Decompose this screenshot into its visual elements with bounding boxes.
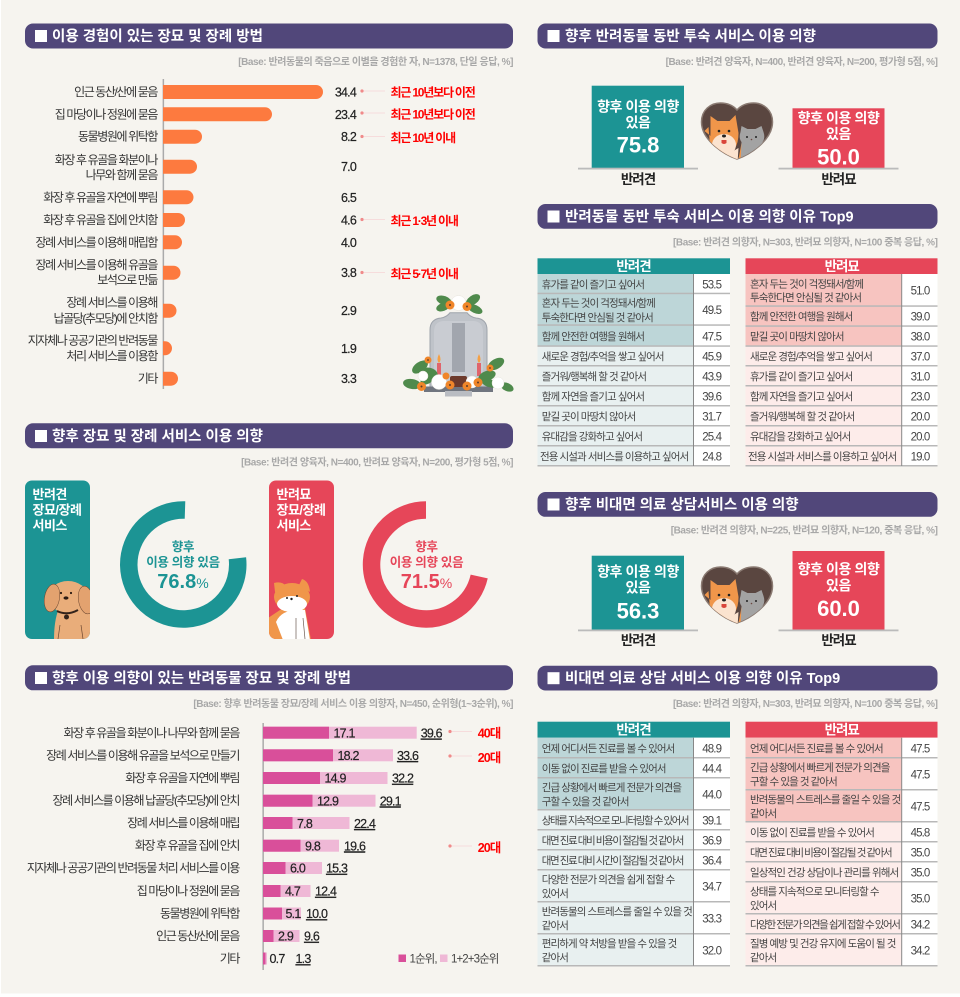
row: 장례 서비스를 이용해 매립: 22.4 — [354, 817, 376, 831]
row: 인근 동산/산에 묻음: 2.9 — [278, 930, 294, 944]
row: 장례 서비스를 이용해 유골을 보석으로 만들기: 장례 서비스를 이용해 유골을 보석으로 만들기 — [46, 748, 239, 762]
bar: 반려견 75.8: 75.8 — [617, 133, 659, 158]
heading: 향후 비대면 의료 상담서비스 이용 의향: 향후 비대면 의료 상담서비스 이용 의향 — [565, 496, 799, 514]
row: 집 마당이나 정원에 묻음 — [137, 884, 337, 899]
panel: 반려묘 장묘/장례 서비스 — [268, 480, 334, 640]
row: 동물병원에 위탁함: 10.0 — [306, 907, 328, 921]
row: 화장 후 유골을 화분이나 나무와 함께 묻음 — [64, 726, 443, 740]
row: 화장 후 유골을 자연에 뿌림: 14.9 — [324, 772, 346, 786]
row: 장례 서비스를 이용해 매립 — [127, 816, 376, 831]
donut chart: 반려견 76.8%: 향후 — [172, 539, 194, 554]
table: 반려묘 투숙 이유: 23.0 — [911, 392, 930, 404]
row: 화장 후 유골을 집에 안치함: 4.6 — [341, 214, 357, 228]
table: 반려묘 비대면 이유: 35.0 — [911, 848, 930, 860]
table: 반려묘 비대면 이유: 있어서 — [750, 900, 777, 912]
callout: 최근 10년 이내: 최근 10년 이내 — [390, 131, 455, 145]
row: 집 마당이나 정원에 묻음: 12.4 — [315, 885, 337, 899]
row: 지자체나 공공기관의 반려동물 처리 서비스를 이용: 6.0 — [290, 862, 306, 876]
heading: 이용 경험이 있는 장묘 및 장례 방법 — [25, 24, 513, 48]
row: 화장 후 유골을 화분이나 나무와 함께 묻음: 17.1 — [334, 726, 355, 740]
row: 장례 서비스를 이용해 납골당(추모당)에 안치: 12.9 — [317, 794, 339, 808]
row: 장례 서비스를 이용해 납골당(추모당)에 안치 — [53, 794, 402, 808]
table: 반려묘 비대면 이유: 같아서 — [750, 952, 777, 964]
table: 반려견 투숙 이유: 43.9 — [702, 372, 722, 384]
row: 화장 후 유골을 자연에 뿌림 — [43, 190, 357, 205]
heading: 향후 이용 의향이 있는 반려동물 장묘 및 장례 방법: 향후 이용 의향이 있는 반려동물 장묘 및 장례 방법 — [52, 670, 351, 687]
callout: 최근 1·3년 이내 — [360, 214, 458, 228]
bar: 반려묘 60.0: 있음 — [826, 578, 851, 594]
row: 화장 후 유골을 집에 안치함: 화장 후 유골을 집에 안치함 — [43, 213, 158, 227]
table: 반려묘 비대면 이유: 대면 진료 대비 비용이 절감될 것 같아서 — [750, 846, 892, 859]
table: 반려묘 비대면 이유: 47.5 — [911, 802, 930, 814]
row: 집 마당이나 정원에 묻음 — [55, 107, 357, 122]
callout: 최근 10년보다 이전 (1) — [360, 84, 476, 100]
table: 반려묘 비대면 이유 — [746, 722, 938, 966]
row: 기타 — [138, 372, 357, 386]
legend: 1+2+3순위 — [451, 952, 499, 966]
row: 화장 후 유골을 자연에 뿌림 — [125, 771, 414, 786]
table: 반려묘 투숙 이유: 31.0 — [911, 372, 930, 384]
table: 반려묘 투숙 이유 — [746, 258, 938, 466]
table: 반려견 비대면 이유: 이동 없이 진료를 받을 수 있어서 — [542, 762, 666, 775]
table: 반려묘 비대면 이유: 반려동물의 스트레스를 줄일 수 있을 것 — [750, 793, 900, 806]
table: 반려묘 투숙 이유: 51.0 — [911, 286, 930, 298]
row: 기타: 3.3 — [341, 372, 357, 386]
heading: 향후 장묘 및 장례 서비스 이용 의향: 향후 장묘 및 장례 서비스 이용 의향 — [52, 428, 263, 445]
row: 장례 서비스를 이용해 납골당(추모당)에 안치: 장례 서비스를 이용해 납골당(추모당)에 안치 — [53, 794, 239, 808]
table: 반려묘 비대면 이유: 일상적인 건강 상담이나 관리를 위해서 — [750, 866, 898, 879]
table: 반려견 투숙 이유: 새로운 경험/추억을 쌓고 싶어서 — [542, 350, 664, 363]
row: 지자체나 공공기관의 반려동물 처리 서비스를 이용함: 1.9 — [341, 342, 357, 356]
base note: [Base: 반려견 의향자, N=303, 반려묘 의향자, N=100 중복 응답, %] — [673, 236, 938, 248]
table: 반려묘 비대면 이유: 47.5 — [911, 744, 930, 756]
table: 반려묘 투숙 이유: 휴가를 같이 즐기고 싶어서 — [750, 371, 853, 383]
row: 인근 동산/산에 묻음: 인근 동산/산에 묻음 — [74, 85, 158, 99]
table: 반려견 비대면 이유: 같아서 — [542, 920, 568, 932]
row: 기타: 기타 — [138, 372, 158, 386]
row: 동물병원에 위탁함: 5.1 — [286, 907, 301, 921]
bar: 반려견 56.3: 있음 — [626, 580, 651, 596]
table: 반려견 비대면 이유: 39.1 — [702, 816, 722, 828]
panel: 반려견 장묘/장례 서비스 — [25, 480, 96, 640]
row: 장례 서비스를 이용해 매립: 7.8 — [297, 817, 313, 831]
row: 집 마당이나 정원에 묻음: 23.4 — [335, 108, 357, 122]
heading: 이용 경험이 있는 장묘 및 장례 방법: 이용 경험이 있는 장묘 및 장례 방법 — [52, 28, 263, 45]
bar: 반려견 75.8: 향후 이용 의향 — [597, 99, 679, 115]
table: 반려견 비대면 이유: 44.4 — [702, 764, 723, 776]
callout: 최근 5·7년 이내 — [360, 267, 458, 281]
table: 반려견 투숙 이유: 53.5 — [702, 280, 722, 292]
row: 동물병원에 위탁함 — [160, 906, 328, 921]
table: 반려견 비대면 이유: 같아서 — [542, 952, 568, 964]
row: 인근 동산/산에 묻음: 9.6 — [304, 930, 320, 944]
table: 반려묘 비대면 이유: 다양한 전문가 의견을 쉽게 접할 수 있어서 — [750, 919, 900, 931]
row: 장례 서비스를 이용해 유골을 보석으로 만듦: 3.8 — [341, 266, 357, 280]
bar: 반려묘 50.0: 반려묘 — [821, 172, 856, 187]
panel: 반려견 장묘/장례 서비스: 장묘/장례 — [32, 502, 81, 518]
heading: 반려동물 동반 투숙 서비스 이용 의향 이유 Top9 — [538, 204, 938, 229]
row: 장례 서비스를 이용해 매립함: 장례 서비스를 이용해 매립함 — [36, 235, 158, 249]
row: 화장 후 유골을 집에 안치: 화장 후 유골을 집에 안치 — [135, 839, 239, 853]
row: 장례 서비스를 이용해 매립함 — [36, 235, 357, 250]
bar: 반려묘 60.0: 반려묘 — [821, 633, 856, 648]
table: 반려견 비대면 이유: 반려동물의 스트레스를 줄일 수 있을 것 — [542, 905, 692, 918]
table: 반려묘 비대면 이유: 긴급 상황에서 빠르게 전문가 의견을 — [750, 762, 891, 774]
table: 반려견 투숙 이유: 39.6 — [702, 392, 722, 404]
row: 인근 동산/산에 묻음 — [74, 85, 357, 100]
heading: 비대면 의료 상담 서비스 이용 의향 이유 Top9 — [538, 666, 938, 690]
table: 반려묘 비대면 이유: 상태를 지속적으로 모니터링할 수 — [750, 886, 880, 898]
row: 장례 서비스를 이용해 납골당(추모당)에 안치함: 납골당(추모당)에 안치함 — [53, 311, 158, 325]
row: 화장 후 유골을 화분이나 나무와 함께 묻음: 화장 후 유골을 화분이나 — [55, 153, 158, 167]
table: 반려견 투숙 이유: 휴가를 같이 즐기고 싶어서 — [542, 279, 644, 291]
legend — [398, 952, 499, 966]
row: 지자체나 공공기관의 반려동물 처리 서비스를 이용함: 처리 서비스를 이용함 — [66, 349, 158, 363]
icon: dog — [44, 581, 90, 639]
table: 반려견 투숙 이유: 유대감을 강화하고 싶어서 — [542, 430, 642, 443]
callout: 최근 5·7년 이내: 최근 5·7년 이내 — [390, 267, 458, 281]
table: 반려견 투숙 이유: 전용 시설과 서비스를 이용하고 싶어서 — [540, 450, 688, 463]
callout: 20대 (1) — [448, 751, 501, 765]
icon: cat — [268, 579, 311, 640]
donut chart: 반려견 76.8%: 이용 의향 있음 — [146, 554, 220, 570]
table: 반려묘 비대면 이유: 35.0 — [911, 894, 930, 906]
donut chart: 반려묘 71.5% — [372, 510, 479, 619]
donut chart: 반려묘 71.5%: 이용 의향 있음 — [390, 554, 463, 570]
bar: 반려견 75.8: 있음 — [626, 115, 651, 131]
row: 기타: 1.3 — [296, 952, 311, 966]
table: 반려묘 비대면 이유: 구할 수 있을 것 같아서 — [750, 776, 837, 788]
table: 반려견 비대면 이유: 언제 어디서든 진료를 볼 수 있어서 — [542, 743, 675, 755]
callout: 최근 10년 이내 — [360, 131, 455, 145]
row: 화장 후 유골을 집에 안치: 9.8 — [305, 839, 321, 853]
row: 장례 서비스를 이용해 매립: 장례 서비스를 이용해 매립 — [127, 816, 239, 830]
table: 반려묘 투숙 이유: 39.0 — [911, 312, 930, 324]
table: 반려견 투숙 이유: 함께 자연을 즐기고 싶어서 — [542, 391, 644, 403]
table: 반려견 투숙 이유 — [538, 258, 730, 466]
row: 화장 후 유골을 화분이나 나무와 함께 묻음 — [55, 153, 357, 182]
icon: dog and cat in heart — [702, 567, 772, 627]
donut chart: 반려묘 71.5%: 향후 — [415, 539, 438, 554]
bar: 반려묘 50.0 — [778, 108, 898, 187]
bar: 반려묘 50.0: 향후 이용 의향 — [798, 110, 880, 126]
callout: 최근 10년보다 이전 (1): 최근 10년보다 이전 — [390, 84, 476, 100]
row: 장례 서비스를 이용해 납골당(추모당)에 안치: 29.1 — [380, 794, 402, 808]
table: 반려묘 투숙 이유: 즐거워/행복해 할 것 같아서 — [750, 410, 855, 423]
row: 장례 서비스를 이용해 유골을 보석으로 만들기: 18.2 — [338, 749, 359, 763]
table: 반려견 비대면 이유: 대면 진료 대비 비용이 절감될 것 같아서 — [542, 834, 684, 847]
row: 기타: 기타 — [220, 952, 240, 966]
table: 반려묘 투숙 이유: 함께 자연을 즐기고 싶어서 — [750, 391, 853, 403]
bar: 반려묘 50.0: 50.0 — [817, 144, 860, 170]
table: 반려견 비대면 이유: 상태를 지속적으로 모니터링할 수 있어서 — [542, 815, 689, 827]
table: 반려묘 투숙 이유: 혼자 두는 것이 걱정돼서/함께 — [750, 278, 863, 290]
heading: 향후 이용 의향이 있는 반려동물 장묘 및 장례 방법 — [25, 665, 513, 690]
callout: 최근 10년보다 이전 (2) — [360, 106, 476, 122]
base note: [Base: 반려동물의 죽음으로 이별을 경험한 자, N=1378, 단일 응답, %] — [238, 55, 513, 68]
table: 반려견 투숙 이유: 즐거워/행복해 할 것 같아서 — [542, 370, 646, 383]
bar chart: 이용 경험 장묘 방법 — [28, 79, 357, 389]
table: 반려견 투숙 이유: 혼자 두는 것이 걱정돼서/함께 — [542, 296, 655, 310]
table: 반려견 비대면 이유: 44.0 — [702, 790, 722, 802]
bar: 반려견 75.8 — [578, 86, 698, 187]
row: 지자체나 공공기관의 반려동물 처리 서비스를 이용함: 지자체나 공공기관의 반려동물 — [28, 334, 158, 348]
heading: 반려동물 동반 투숙 서비스 이용 의향 이유 Top9: 반려동물 동반 투숙 서비스 이용 의향 이유 Top9 — [565, 208, 854, 226]
row: 화장 후 유골을 집에 안치함 — [43, 213, 357, 228]
table: 반려묘 투숙 이유: 함께 안전한 여행을 원해서 — [750, 310, 853, 323]
table: 반려견 투숙 이유: 맡길 곳이 마땅치 않아서 — [542, 410, 636, 423]
row: 화장 후 유골을 화분이나 나무와 함께 묻음: 나무와 함께 묻음 — [86, 168, 158, 182]
table: 반려견 투숙 이유: 47.5 — [702, 332, 722, 344]
base note: [Base: 반려견 의향자, N=303, 반려묘 의향자, N=100 중복 응답, %] — [673, 697, 938, 710]
row: 집 마당이나 정원에 묻음: 집 마당이나 정원에 묻음 — [137, 884, 240, 898]
table: 반려묘 투숙 이유: 투숙한다면 안심될 것 같아서 — [750, 292, 861, 304]
panel: 반려묘 장묘/장례 서비스: 장묘/장례 — [276, 502, 325, 518]
table: 반려묘 비대면 이유: 이동 없이 진료를 받을 수 있어서 — [750, 826, 874, 839]
table: 반려견 비대면 이유: 33.3 — [702, 914, 722, 926]
table: 반려견 비대면 이유: 36.4 — [702, 856, 723, 868]
bar: 반려견 56.3: 향후 이용 의향 — [597, 564, 679, 580]
panel: 반려견 장묘/장례 서비스: 반려견 — [32, 487, 67, 502]
row: 인근 동산/산에 묻음: 34.4 — [335, 86, 357, 100]
row: 장례 서비스를 이용해 납골당(추모당)에 안치함 — [53, 296, 357, 325]
row: 화장 후 유골을 집에 안치: 19.6 — [344, 839, 366, 853]
table: 반려견 비대면 이유: 대면 진료 대비 시간이 절감될 것 같아서 — [542, 854, 684, 867]
row: 지자체나 공공기관의 반려동물 처리 서비스를 이용 — [27, 861, 348, 876]
table: 반려묘 투숙 이유: 새로운 경험/추억을 쌓고 싶어서 — [750, 350, 872, 363]
callout: 20대 (2) — [448, 841, 501, 855]
row: 장례 서비스를 이용해 매립함: 4.0 — [341, 236, 357, 250]
table: 반려묘 비대면 이유: 35.0 — [911, 868, 930, 880]
row: 동물병원에 위탁함: 동물병원에 위탁함 — [78, 130, 158, 144]
base note: [Base: 반려견 양육자, N=400, 반려견 양육자, N=200, 평가형 5점, %] — [666, 55, 938, 68]
donut chart: 반려묘 71.5%: 71.5% — [401, 571, 452, 593]
row: 인근 동산/산에 묻음 — [156, 929, 320, 944]
row: 장례 서비스를 이용해 유골을 보석으로 만듦 — [36, 258, 357, 287]
table: 반려견 비대면 이유: 34.7 — [702, 882, 722, 894]
table: 반려묘 투숙 이유: 20.0 — [911, 412, 930, 424]
table: 반려묘 투숙 이유: 맡길 곳이 마땅치 않아서 — [750, 330, 844, 343]
table: 반려견 투숙 이유: 45.9 — [702, 352, 722, 364]
table: 반려견 비대면 이유: 36.9 — [702, 836, 722, 848]
table: 반려묘 투숙 이유: 유대감을 강화하고 싶어서 — [750, 430, 851, 443]
table: 반려묘 비대면 이유: 같아서 — [750, 808, 777, 820]
bar: 반려견 56.3: 반려견 — [621, 633, 656, 648]
heading: 비대면 의료 상담 서비스 이용 의향 이유 Top9: 비대면 의료 상담 서비스 이용 의향 이유 Top9 — [565, 670, 840, 687]
bar: 반려묘 50.0: 있음 — [826, 126, 851, 142]
table: 반려묘 비대면 이유: 34.2 — [911, 946, 930, 958]
callout: 20대 (2): 20대 — [478, 841, 501, 855]
base note: [Base: 반려견 의향자, N=225, 반려묘 의향자, N=120, 중복 응답, %] — [671, 524, 938, 536]
bar: 반려견 56.3: 56.3 — [617, 598, 659, 624]
callout: 20대 (1): 20대 — [478, 751, 501, 765]
panel: 반려묘 장묘/장례 서비스: 서비스 — [276, 518, 311, 533]
table: 반려묘 투숙 이유: 38.0 — [911, 332, 930, 344]
panel: 반려견 장묘/장례 서비스: 서비스 — [32, 518, 67, 533]
table: 반려견 투숙 이유: 24.8 — [702, 452, 722, 464]
bar: 반려견 75.8: 반려견 — [621, 172, 656, 187]
row: 동물병원에 위탁함 — [78, 130, 357, 144]
row: 집 마당이나 정원에 묻음: 집 마당이나 정원에 묻음 — [55, 107, 158, 121]
table: 반려견 비대면 이유: 있어서 — [542, 888, 568, 900]
row: 화장 후 유골을 자연에 뿌림: 32.2 — [392, 772, 414, 786]
bar: 반려묘 60.0: 향후 이용 의향 — [798, 561, 880, 577]
row: 장례 서비스를 이용해 납골당(추모당)에 안치함: 장례 서비스를 이용해 — [66, 296, 157, 310]
base note: [Base: 반려견 양육자, N=400, 반려묘 양육자, N=200, 평가형 5점, %] — [241, 456, 513, 468]
table: 반려견 비대면 이유: 긴급 상황에서 빠르게 전문가 의견을 — [542, 782, 682, 794]
table: 반려묘 비대면 이유: 47.5 — [911, 770, 930, 782]
table: 반려묘 투숙 이유: 19.0 — [911, 452, 930, 464]
legend: 1순위, — [410, 952, 437, 966]
table: 반려견 비대면 이유: 32.0 — [702, 946, 722, 958]
panel: 반려묘 장묘/장례 서비스: 반려묘 — [276, 487, 311, 502]
row: 화장 후 유골을 자연에 뿌림: 화장 후 유골을 자연에 뿌림 — [125, 771, 239, 785]
table: 반려묘 투숙 이유: 20.0 — [911, 432, 930, 444]
donut chart: 반려견 76.8% — [129, 510, 238, 619]
callout: 최근 10년보다 이전 (2): 최근 10년보다 이전 — [390, 106, 476, 122]
table: 반려묘 투숙 이유: 37.0 — [911, 352, 930, 364]
table: 반려묘 비대면 이유: 45.8 — [911, 828, 930, 840]
table: 반려견 비대면 이유: 다양한 전문가 의견을 쉽게 접할 수 — [542, 874, 676, 886]
row: 화장 후 유골을 화분이나 나무와 함께 묻음: 7.0 — [341, 160, 357, 174]
table: 반려묘 비대면 이유: 질병 예방 및 건강 유지에 도움이 될 것 — [750, 937, 896, 950]
table: 반려견 투숙 이유: 반려견 — [616, 259, 651, 274]
row: 동물병원에 위탁함: 동물병원에 위탁함 — [160, 906, 240, 920]
row: 지자체나 공공기관의 반려동물 처리 서비스를 이용: 15.3 — [326, 862, 348, 876]
row: 화장 후 유골을 자연에 뿌림: 6.5 — [341, 191, 357, 205]
bar: 반려묘 60.0 — [778, 551, 898, 648]
icon: dog and cat in heart — [702, 103, 772, 163]
stacked bar chart: 향후 이용 의향 방법 — [27, 723, 443, 970]
callout: 40대: 40대 — [478, 726, 501, 740]
row: 장례 서비스를 이용해 유골을 보석으로 만듦: 보석으로 만듦 — [97, 273, 158, 287]
table: 반려견 투숙 이유: 투숙한다면 안심될 것 같아서 — [542, 312, 653, 324]
table: 반려견 비대면 이유: 48.9 — [702, 744, 722, 756]
row: 화장 후 유골을 집에 안치 — [135, 839, 366, 853]
table: 반려묘 투숙 이유: 전용 시설과 서비스를 이용하고 싶어서 — [748, 450, 896, 463]
row: 집 마당이나 정원에 묻음: 4.7 — [285, 885, 301, 899]
row: 지자체나 공공기관의 반려동물 처리 서비스를 이용함 — [28, 334, 357, 363]
heading: 향후 비대면 의료 상담서비스 이용 의향 — [538, 492, 938, 517]
row: 동물병원에 위탁함: 8.2 — [341, 130, 357, 144]
row: 화장 후 유골을 화분이나 나무와 함께 묻음: 화장 후 유골을 화분이나 나무와 함께 묻음 — [64, 726, 240, 740]
callout: 40대 — [448, 726, 501, 740]
table: 반려견 비대면 이유: 편리하게 약 처방을 받을 수 있을 것 — [542, 937, 677, 950]
table: 반려묘 비대면 이유: 반려묘 — [825, 722, 859, 738]
bar: 반려견 56.3 — [578, 556, 698, 648]
row: 기타 — [220, 952, 311, 966]
table: 반려견 비대면 이유: 반려견 — [616, 722, 651, 738]
heading: 향후 반려동물 동반 투숙 서비스 이용 의향: 향후 반려동물 동반 투숙 서비스 이용 의향 — [565, 28, 816, 45]
table: 반려견 투숙 이유: 함께 안전한 여행을 원해서 — [542, 330, 644, 343]
heading: 향후 반려동물 동반 투숙 서비스 이용 의향 — [538, 24, 938, 48]
row: 장례 서비스를 이용해 유골을 보석으로 만듦: 장례 서비스를 이용해 유골을 — [36, 258, 158, 272]
bar: 반려묘 60.0: 60.0 — [817, 596, 860, 621]
row: 기타: 0.7 — [270, 952, 285, 966]
table: 반려견 비대면 이유: 구할 수 있을 것 같아서 — [542, 796, 629, 808]
table: 반려묘 비대면 이유: 34.2 — [911, 920, 930, 932]
row: 장례 서비스를 이용해 유골을 보석으로 만들기: 33.6 — [397, 749, 419, 763]
callout: 최근 1·3년 이내: 최근 1·3년 이내 — [390, 214, 458, 228]
row: 지자체나 공공기관의 반려동물 처리 서비스를 이용: 지자체나 공공기관의 반려동물 처리 서비스를 이용 — [27, 861, 240, 875]
table: 반려견 투숙 이유: 25.4 — [702, 432, 723, 444]
table: 반려견 비대면 이유 — [538, 722, 730, 966]
table: 반려견 투숙 이유: 49.5 — [702, 305, 722, 317]
heading: 향후 장묘 및 장례 서비스 이용 의향 — [25, 423, 513, 448]
row: 화장 후 유골을 화분이나 나무와 함께 묻음: 39.6 — [421, 726, 443, 740]
donut chart: 반려견 76.8%: 76.8% — [157, 571, 209, 593]
base note: [Base: 향후 반려동물 장묘/장례 서비스 이용 의향자, N=450, 순위형(1~3순위), %] — [193, 697, 513, 710]
table: 반려묘 비대면 이유: 언제 어디서든 진료를 볼 수 있어서 — [750, 743, 883, 755]
row: 인근 동산/산에 묻음: 인근 동산/산에 묻음 — [156, 929, 240, 943]
row: 화장 후 유골을 자연에 뿌림: 화장 후 유골을 자연에 뿌림 — [43, 190, 157, 204]
row: 장례 서비스를 이용해 납골당(추모당)에 안치함: 2.9 — [341, 304, 357, 318]
icon: tombstone with flowers — [402, 292, 515, 396]
table: 반려묘 투숙 이유: 반려묘 — [825, 259, 859, 274]
table: 반려견 투숙 이유: 31.7 — [702, 412, 722, 424]
row: 장례 서비스를 이용해 유골을 보석으로 만들기 — [46, 748, 419, 763]
